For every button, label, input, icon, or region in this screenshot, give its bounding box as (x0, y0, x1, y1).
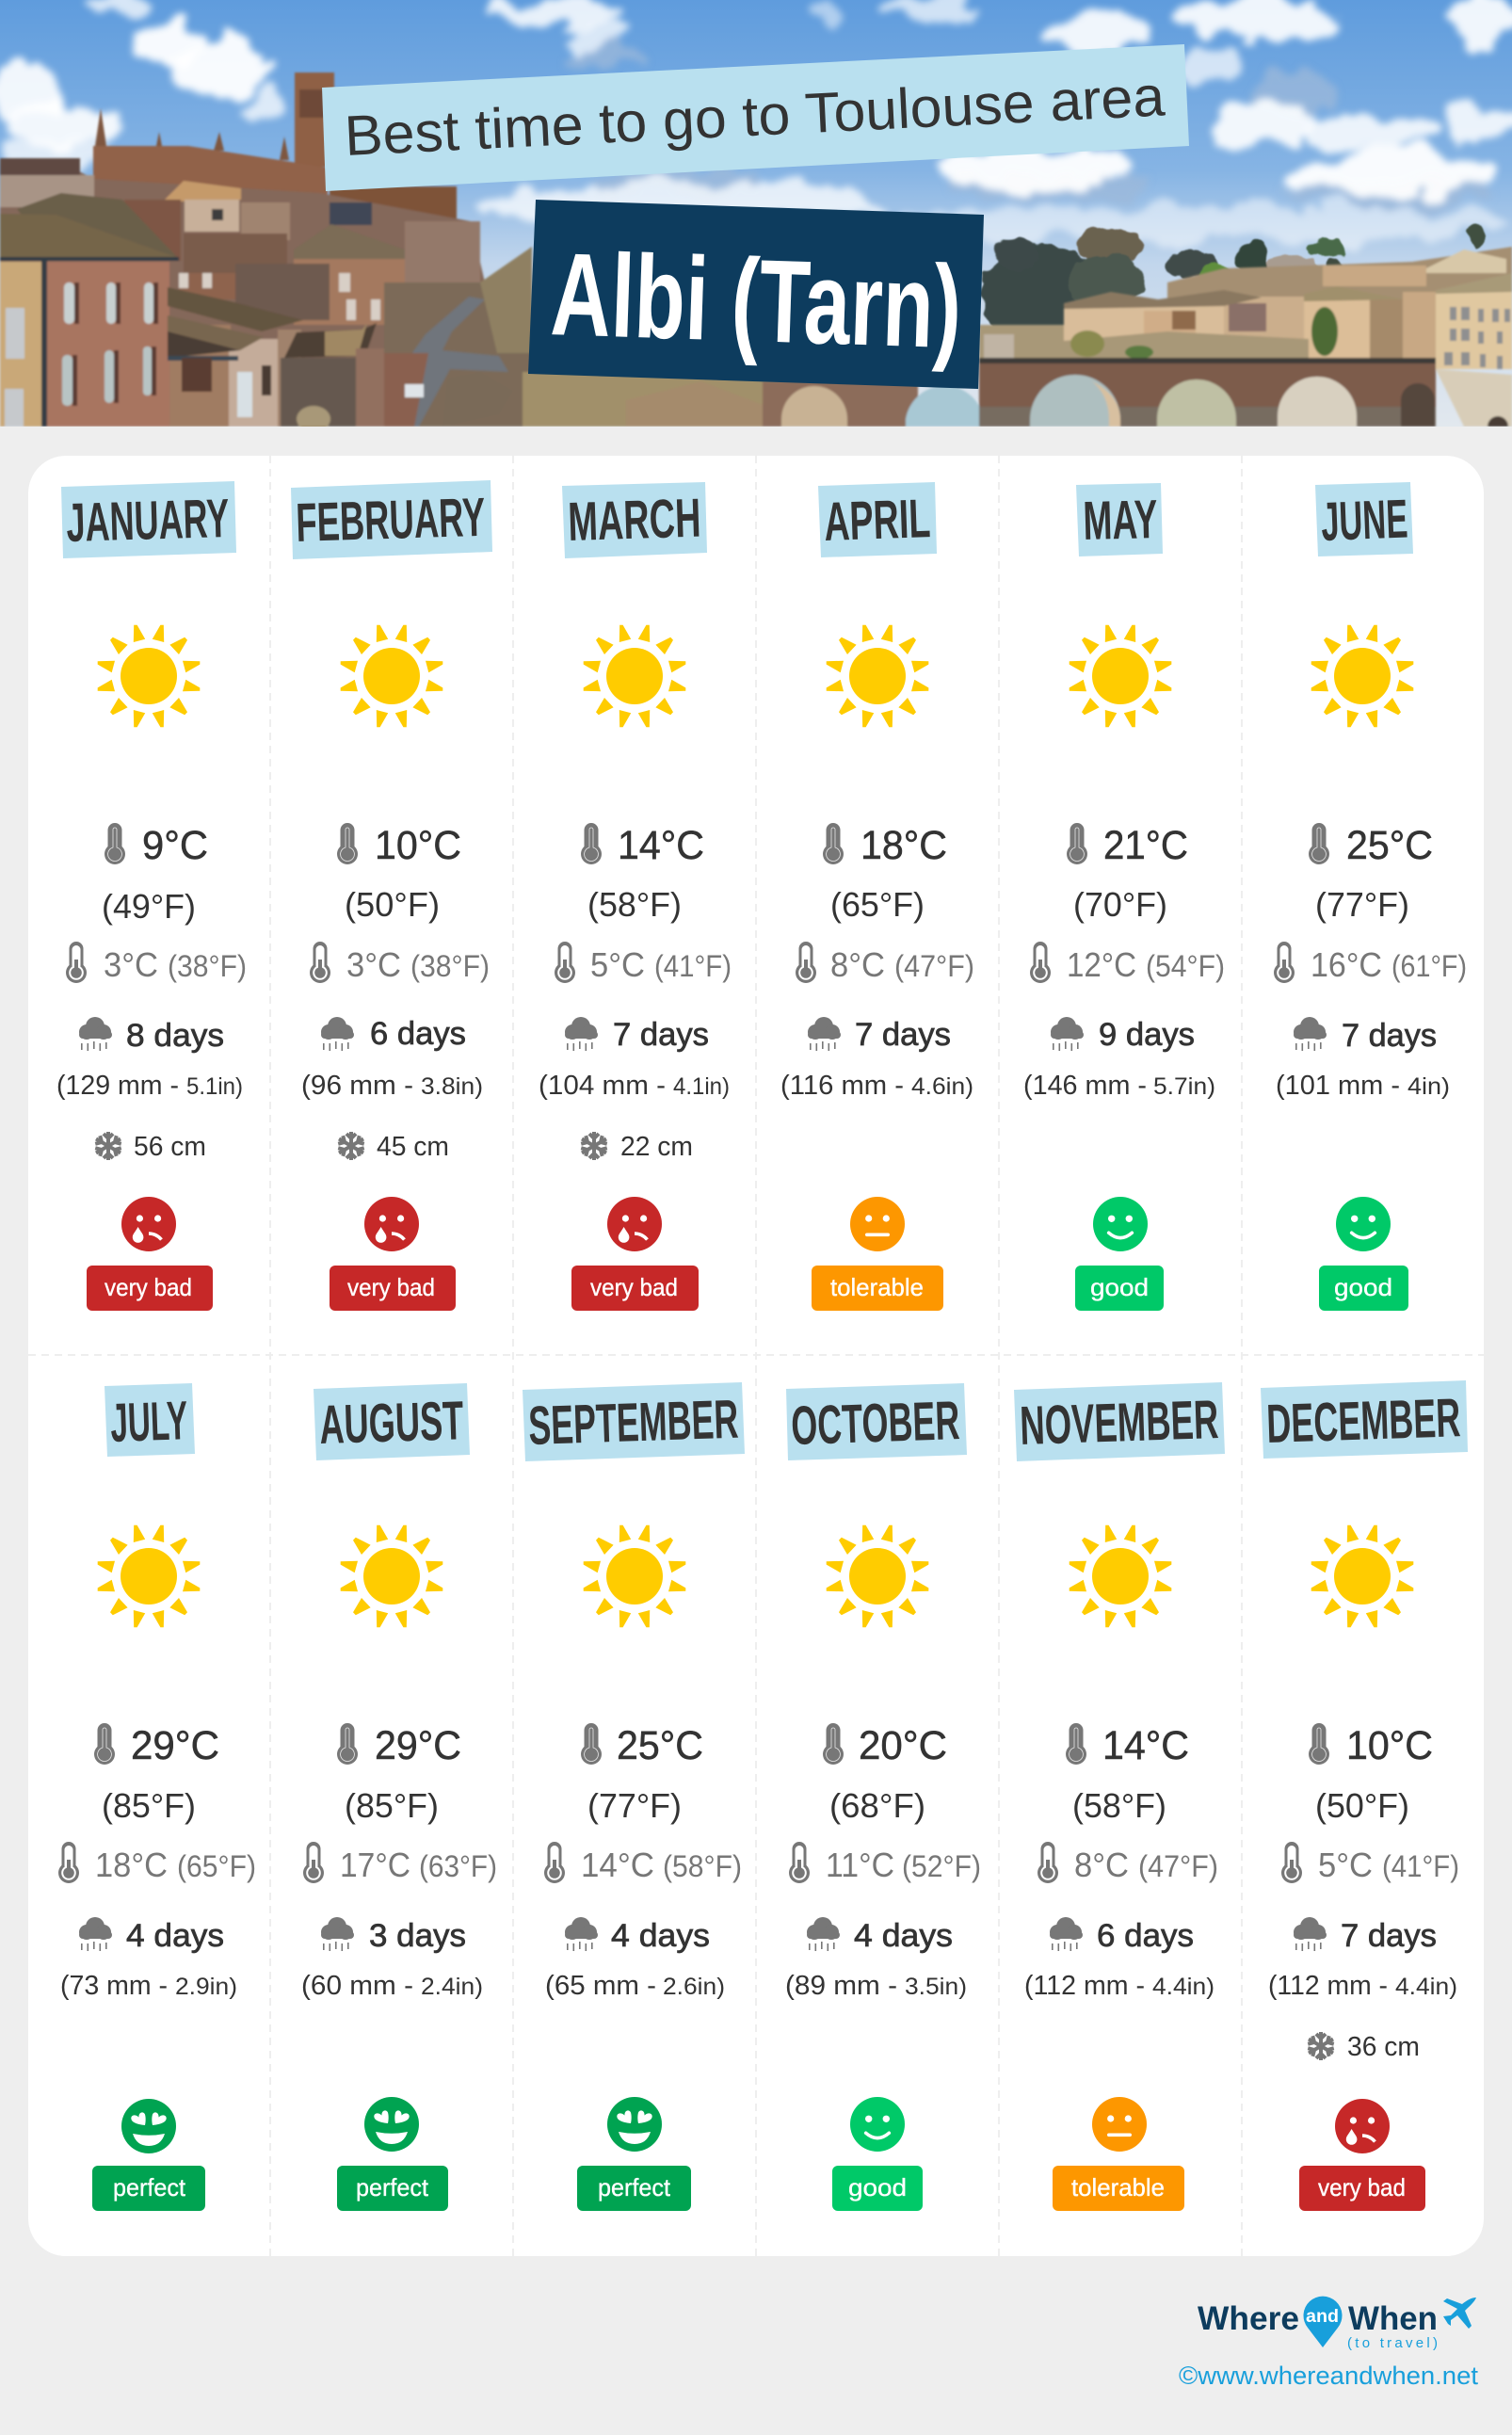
high temperature: 14°C (1102, 1723, 1189, 1768)
icon: airplane (1443, 2298, 1476, 2329)
low temperature: (41°F) (654, 949, 732, 983)
rating: very bad: very bad (347, 1273, 435, 1301)
low temperature: (47°F) (1138, 1849, 1218, 1883)
icon: sun (827, 625, 928, 727)
high temperature: 20°C (859, 1723, 947, 1768)
high temperature (1066, 1723, 1189, 1768)
rainfall: (60 mm - (301, 1971, 413, 2001)
rain days: 7 days (613, 1017, 709, 1053)
rainfall: 2.6in) (663, 1974, 725, 2000)
high temperature (1067, 823, 1188, 868)
high temperature (581, 1723, 703, 1768)
icon: sun (1070, 625, 1171, 727)
low temperature: 3°C (346, 945, 401, 984)
rainfall: (73 mm - (60, 1971, 168, 2001)
rating: good (832, 2097, 923, 2211)
header photo: Albi skyline (0, 0, 1512, 432)
big right building (1436, 290, 1512, 369)
low temperature: 11°C (826, 1846, 894, 1884)
month label: MAY (1083, 489, 1158, 552)
low temperature (1030, 942, 1225, 984)
rating: very bad (571, 1197, 699, 1311)
high temperature fahrenheit: (70°F) (1073, 885, 1167, 924)
high temperature (337, 823, 461, 868)
high temperature (1309, 823, 1433, 868)
rating: good: good (1334, 1273, 1392, 1301)
high temperature (581, 823, 704, 868)
icon: sun (1311, 625, 1413, 727)
low temperature: (52°F) (902, 1849, 981, 1883)
low temperature: (38°F) (410, 949, 490, 983)
rating: good (1075, 1197, 1164, 1311)
rain days: 4 days (854, 1918, 953, 1954)
month label: JUNE (1320, 489, 1408, 553)
rain days (808, 1017, 951, 1053)
low temperature: 18°C (95, 1846, 168, 1884)
month label (1014, 1382, 1225, 1461)
rainfall: 5.7in) (1153, 1073, 1215, 1100)
high temperature fahrenheit: (77°F) (1315, 885, 1409, 924)
rain days: 7 days (1342, 1018, 1437, 1054)
high temperature fahrenheit: (58°F) (1072, 1786, 1166, 1825)
rainfall: 3.8in) (421, 1073, 483, 1100)
rain days: 8 days (126, 1018, 224, 1054)
logo: Where and When (to travel): (to travel) (1347, 2335, 1438, 2351)
low temperature: 5°C (590, 945, 645, 984)
month label (818, 482, 937, 557)
low temperature: (47°F) (894, 949, 974, 983)
high temperature (823, 823, 947, 868)
high temperature fahrenheit: (58°F) (587, 885, 682, 924)
panel: February (291, 480, 492, 1311)
rain days: 9 days (1099, 1017, 1195, 1053)
rain days (79, 1017, 224, 1054)
panel: May (1023, 483, 1225, 1311)
low temperature: 8°C (830, 945, 885, 984)
rainfall: 4.1in) (673, 1073, 730, 1100)
rainfall: 4.6in) (911, 1073, 973, 1100)
rain days (807, 1917, 953, 1954)
low temperature: 17°C (340, 1846, 410, 1884)
rating: very bad: very bad (1318, 2173, 1406, 2201)
panel: October (785, 1383, 981, 2211)
gate (281, 358, 384, 427)
panel: March (539, 482, 732, 1311)
rainfall (301, 1971, 483, 2001)
rainfall (1024, 1971, 1214, 2001)
month label: NOVEMBER (1019, 1389, 1219, 1457)
panel: December (1261, 1380, 1468, 2211)
rain days (1050, 1917, 1194, 1954)
rainfall: 4.4in) (1395, 1974, 1457, 2000)
high temperature fahrenheit: (85°F) (102, 1786, 196, 1825)
high temperature: 25°C (1346, 823, 1433, 868)
rain days (565, 1017, 709, 1053)
snow (94, 1132, 206, 1162)
panel: September (523, 1382, 745, 2211)
icon: sun (341, 625, 442, 727)
low temperature: 16°C (1311, 945, 1382, 984)
month label: JANUARY (65, 488, 230, 554)
rating: very bad (330, 1197, 456, 1311)
destination banner: Albi (Tarn) (528, 200, 984, 389)
low temperature: 5°C (1318, 1846, 1373, 1884)
logo: Where and When (to travel) (1198, 2297, 1476, 2351)
month label: APRIL (823, 488, 931, 553)
snow (580, 1132, 693, 1162)
rating: perfect (337, 2097, 448, 2211)
month label: OCTOBER (790, 1390, 960, 1457)
month label: MARCH (567, 488, 701, 553)
month label (1076, 483, 1163, 556)
rainfall: 4in) (1407, 1073, 1450, 1100)
rainfall: (65 mm - (545, 1971, 656, 2001)
rainfall: 4.4in) (1152, 1974, 1214, 2000)
month label (61, 481, 236, 558)
rain days: 7 days (1341, 1918, 1437, 1954)
low temperature (1281, 1842, 1459, 1884)
panel: November (1014, 1382, 1225, 2211)
icon: sun (827, 1525, 928, 1627)
snow (337, 1132, 449, 1162)
low temperature: (38°F) (168, 949, 247, 983)
icon: sun (98, 625, 200, 727)
month label (562, 482, 707, 558)
low temperature (555, 942, 732, 984)
low temperature (58, 1842, 256, 1884)
month label: SEPTEMBER (527, 1389, 739, 1457)
high temperature fahrenheit: (68°F) (829, 1786, 925, 1825)
rain days: 6 days (370, 1016, 466, 1052)
rainfall: 2.9in) (175, 1974, 237, 2000)
rain days: 4 days (611, 1918, 710, 1954)
icon: sun (584, 625, 685, 727)
rating: tolerable: tolerable (1071, 2173, 1165, 2201)
logo: Where and When (to travel): Where (1198, 2300, 1299, 2337)
snow (1307, 2032, 1420, 2062)
rainfall: (89 mm - (785, 1971, 897, 2001)
rain days: 4 days (126, 1918, 224, 1954)
rating: very bad: very bad (590, 1273, 678, 1301)
rainfall (56, 1071, 243, 1101)
low temperature (1274, 942, 1467, 984)
rainfall: 3.5in) (905, 1974, 967, 2000)
low temperature (544, 1842, 742, 1884)
snow: 22 cm (620, 1132, 693, 1162)
panel: monthly calendar card (28, 456, 1484, 2256)
road and right trees (384, 282, 532, 427)
low temperature: 3°C (104, 945, 158, 984)
rainfall (301, 1071, 483, 1101)
rainfall (1023, 1071, 1215, 1101)
rating: very bad (87, 1197, 213, 1311)
month label: FEBRUARY (295, 487, 486, 554)
right hill houses (1167, 247, 1512, 325)
month label (1315, 482, 1413, 556)
high temperature (1309, 1723, 1433, 1768)
logo: Where and When (to travel): and (1306, 2307, 1339, 2327)
low temperature: 14°C (581, 1846, 654, 1884)
high temperature fahrenheit: (50°F) (1315, 1786, 1409, 1825)
rating: tolerable (812, 1197, 943, 1311)
rain days: 7 days (855, 1017, 951, 1053)
rating: very bad (1299, 2099, 1425, 2211)
low temperature (796, 942, 974, 984)
high temperature fahrenheit: (50°F) (345, 885, 440, 924)
mid houses (169, 325, 231, 427)
rainfall (780, 1071, 973, 1101)
rainfall (539, 1071, 730, 1101)
title banner: Best time to go to Toulouse area: Best time to go to Toulouse area (343, 64, 1166, 168)
rainfall (1268, 1971, 1457, 2001)
rating: good (1319, 1197, 1408, 1311)
low temperature: (61°F) (1391, 949, 1467, 983)
high temperature (105, 823, 208, 868)
rating: perfect (92, 2099, 205, 2211)
month label (314, 1383, 470, 1460)
low temperature: (63°F) (419, 1849, 497, 1883)
high temperature fahrenheit: (49°F) (102, 887, 196, 926)
panel: July (58, 1383, 256, 2211)
rating: tolerable: tolerable (830, 1273, 924, 1301)
high temperature: 10°C (1346, 1723, 1433, 1768)
logo: Where and When (to travel): When (1348, 2300, 1438, 2337)
month label (786, 1383, 967, 1460)
snow: 56 cm (134, 1132, 206, 1162)
rating: perfect: perfect (598, 2173, 671, 2201)
rain days (321, 1016, 466, 1052)
rainfall (545, 1971, 725, 2001)
icon: sun (1070, 1525, 1171, 1627)
rain days (79, 1917, 224, 1954)
rainfall (785, 1971, 967, 2001)
high temperature (94, 1723, 219, 1768)
high temperature (337, 1723, 461, 1768)
icon: sun (584, 1525, 685, 1627)
rainfall: (116 mm - (780, 1071, 904, 1101)
month label (523, 1382, 745, 1461)
rating: good: good (1090, 1273, 1149, 1301)
rating: good: good (848, 2173, 907, 2201)
tan wall (0, 262, 44, 427)
rainfall: 5.1in) (186, 1073, 243, 1100)
low temperature (1037, 1842, 1218, 1884)
brick wall (47, 262, 169, 427)
website credit: ©www.whereandwhen.net (1179, 2362, 1478, 2390)
rain days: 6 days (1097, 1918, 1194, 1954)
low temperature: 8°C (1074, 1846, 1129, 1884)
title banner: Best time to go to Toulouse area (322, 44, 1189, 191)
rainfall: (112 mm - (1268, 1971, 1388, 2001)
rainfall: (101 mm - (1276, 1071, 1400, 1101)
rating: perfect (577, 2097, 691, 2211)
rain days (1051, 1017, 1195, 1053)
icon: map pin (1303, 2297, 1343, 2347)
rain days (565, 1917, 710, 1954)
rainfall (60, 1971, 237, 2001)
month label (105, 1383, 195, 1457)
rating: tolerable (1053, 2097, 1184, 2211)
rain days (1294, 1017, 1437, 1054)
rainfall: (96 mm - (301, 1071, 413, 1101)
right hill trees (981, 222, 1487, 327)
icon: sun (1311, 1525, 1413, 1627)
low temperature: (65°F) (177, 1849, 256, 1883)
low temperature (789, 1842, 981, 1884)
rainfall: (129 mm - (56, 1071, 179, 1101)
rain days: 3 days (369, 1918, 466, 1954)
snow: 36 cm (1347, 2032, 1420, 2062)
low temperature: 12°C (1067, 945, 1136, 984)
panel: April (780, 482, 974, 1311)
high temperature: 9°C (142, 823, 208, 868)
high temperature: 25°C (617, 1723, 703, 1768)
high temperature fahrenheit: (77°F) (587, 1786, 682, 1825)
high temperature: 29°C (131, 1723, 219, 1768)
high temperature: 29°C (375, 1723, 461, 1768)
low temperature: (54°F) (1146, 949, 1225, 983)
month label (291, 480, 492, 559)
high temperature: 10°C (375, 823, 461, 868)
low temperature: (41°F) (1382, 1849, 1459, 1883)
high temperature: 18°C (861, 823, 947, 868)
cathedral (295, 73, 334, 167)
icon: sun (341, 1525, 442, 1627)
low temperature (303, 1842, 497, 1884)
rating: perfect: perfect (356, 2173, 429, 2201)
rain days (1294, 1917, 1437, 1954)
rainfall: (112 mm - (1024, 1971, 1145, 2001)
low temperature (66, 942, 247, 984)
old town base (0, 171, 486, 360)
low temperature (310, 942, 490, 984)
high temperature: 14°C (618, 823, 704, 868)
rain days (321, 1917, 466, 1954)
snow: 45 cm (377, 1132, 449, 1162)
high temperature fahrenheit: (85°F) (345, 1786, 439, 1825)
month label: AUGUST (318, 1390, 464, 1456)
low temperature: (58°F) (663, 1849, 742, 1883)
rainfall: (104 mm - (539, 1071, 666, 1101)
month label: JULY (109, 1390, 188, 1454)
panel: January (56, 481, 247, 1311)
high temperature fahrenheit: (65°F) (830, 885, 925, 924)
rating: very bad: very bad (105, 1273, 192, 1301)
rainfall: 2.4in) (421, 1974, 483, 2000)
high temperature: 21°C (1103, 823, 1188, 868)
icon: sun (98, 1525, 200, 1627)
bridge (977, 362, 1438, 409)
destination banner: Albi (Tarn): Albi (Tarn) (549, 229, 963, 373)
rating: perfect: perfect (113, 2173, 186, 2201)
centre bottom under box (523, 372, 918, 427)
panel: June (1274, 482, 1467, 1311)
panel: August (301, 1383, 497, 2211)
rainfall: (146 mm - (1023, 1071, 1147, 1101)
